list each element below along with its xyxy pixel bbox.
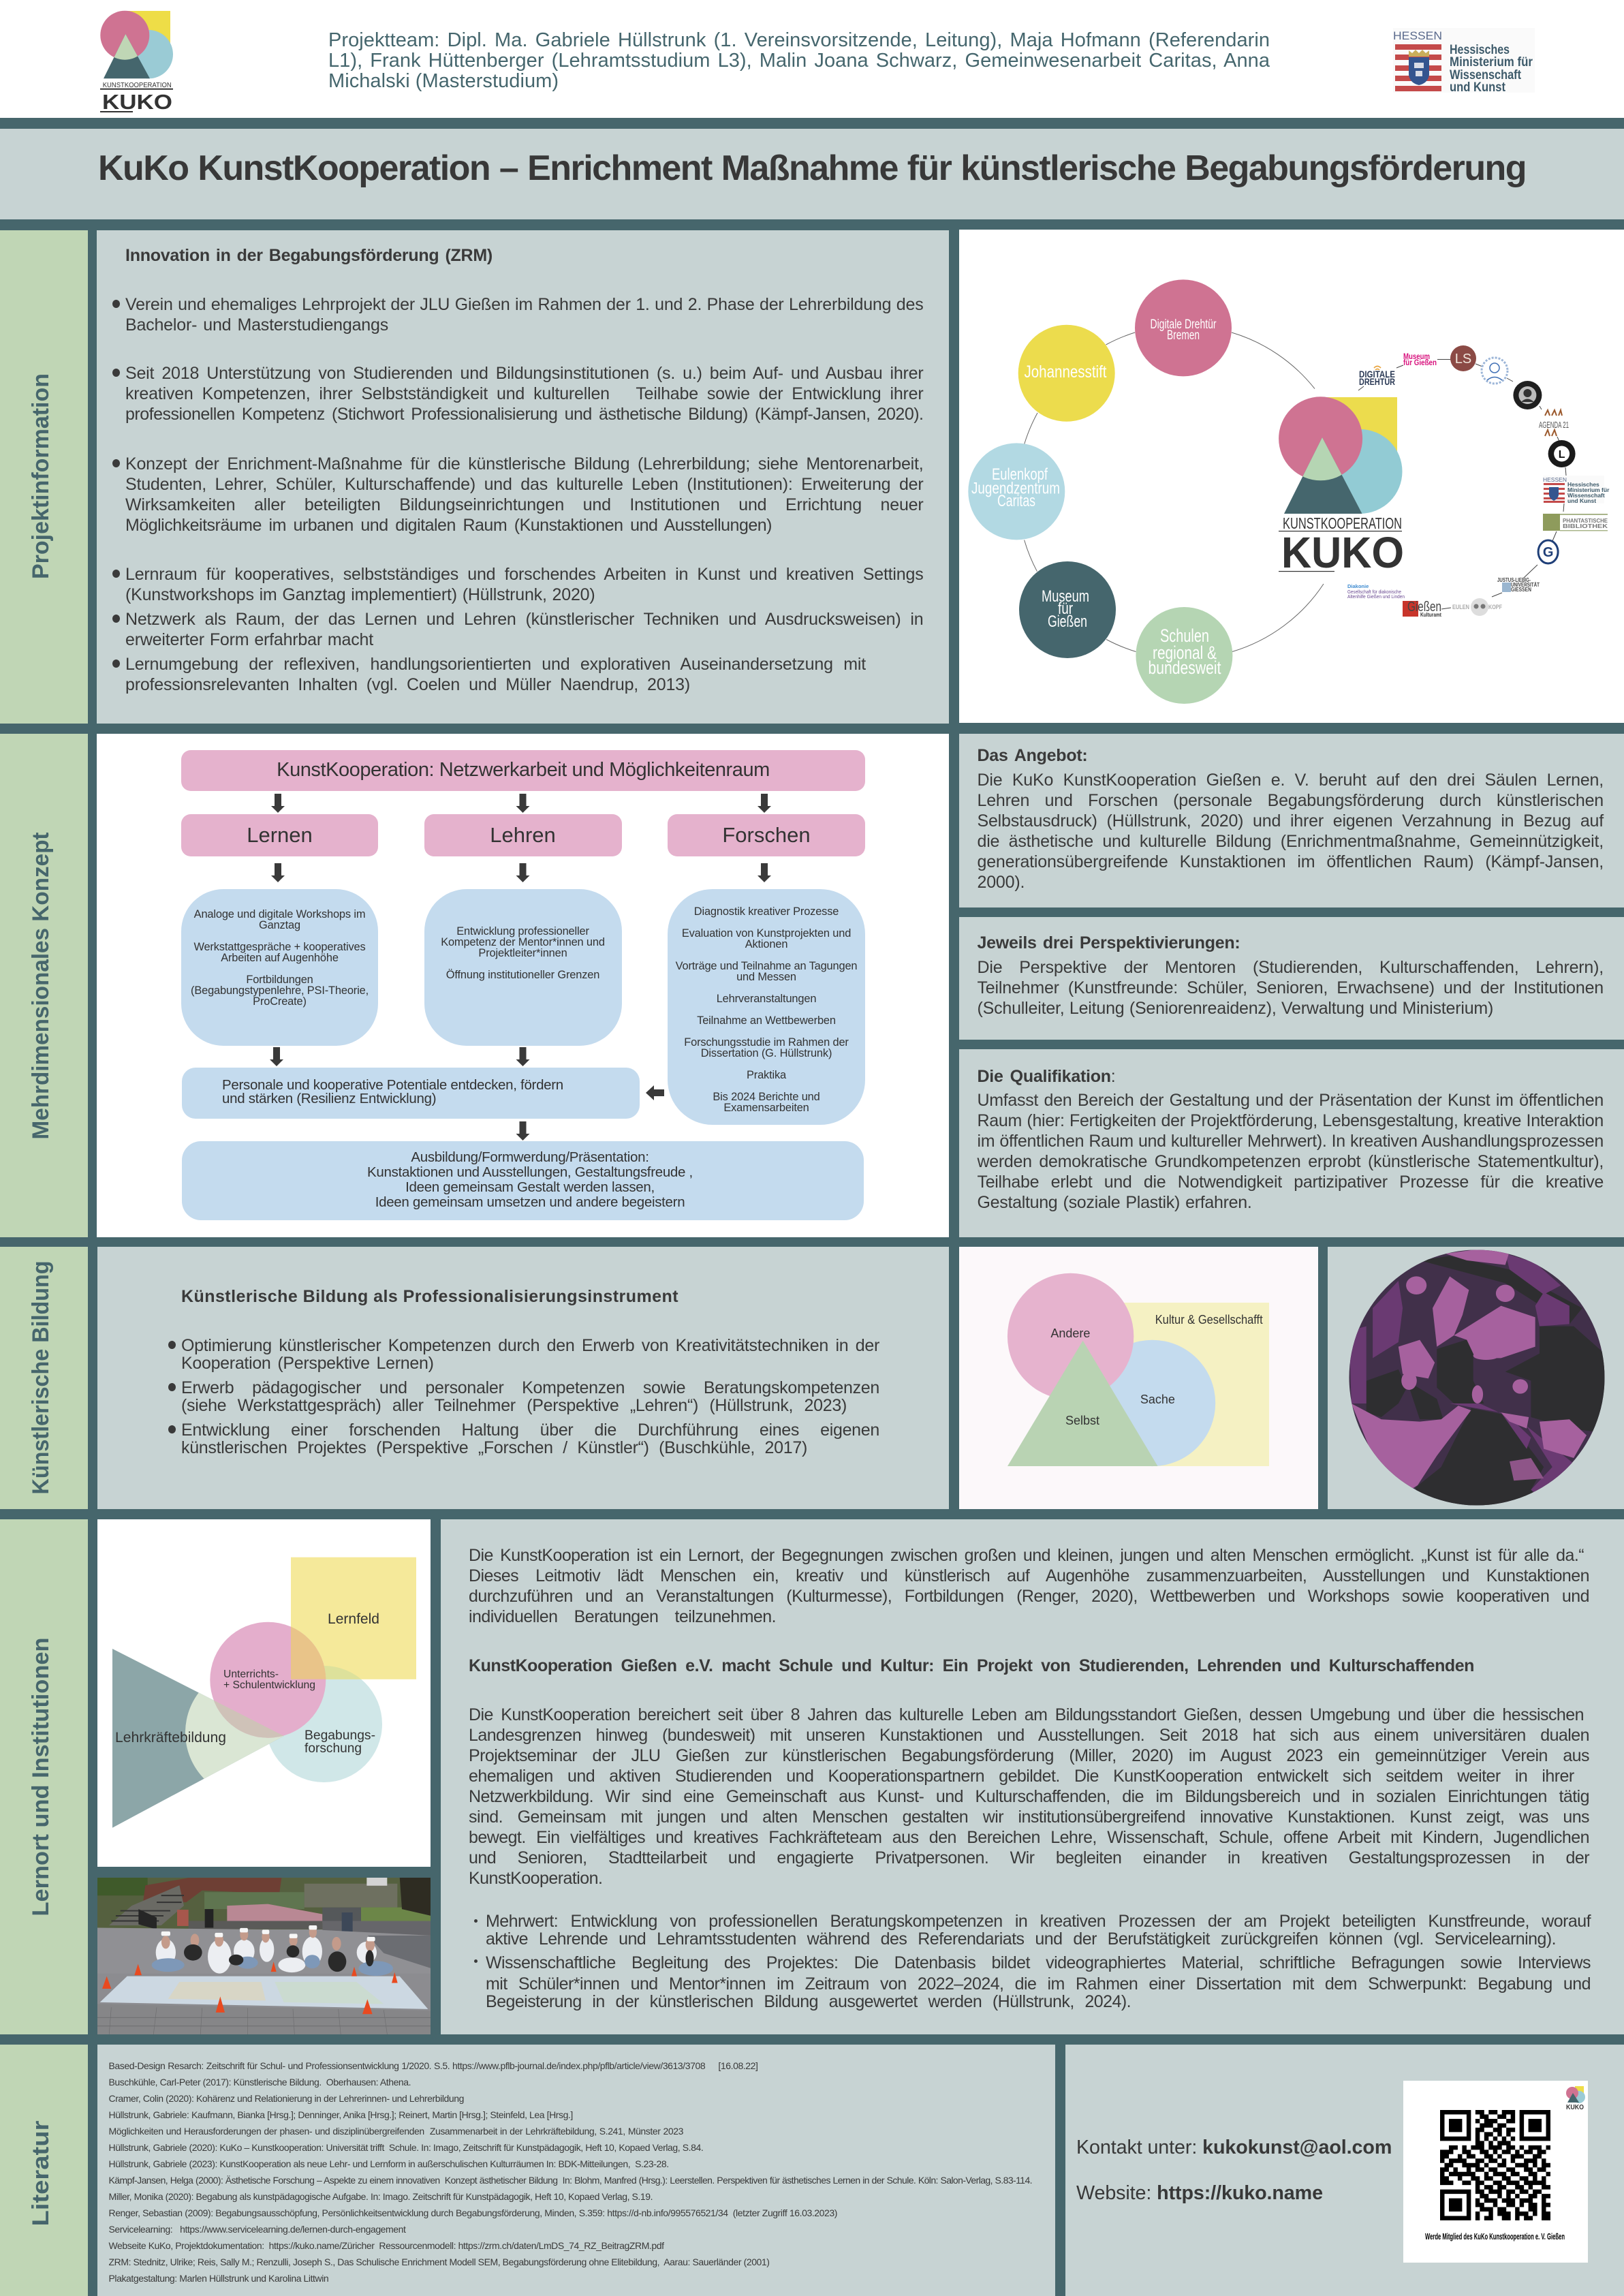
sidebar label: Literatur: Literatur — [28, 2120, 54, 2227]
partner logo: Digitale Drehtür: DREHTÜR — [1359, 376, 1395, 387]
box: Ausbildung: Ausbildung/Formwerdung/Präsentation: — [411, 1149, 649, 1165]
bullet: Entwicklung: Entwicklung einer forschenden Haltung über die Durchführung eines eigenen — [181, 1421, 879, 1440]
box: Lehren details: Entwicklung professioneller — [456, 925, 589, 937]
partner logo: Museum für Gießen: Museum — [1403, 353, 1430, 361]
shape: Pink-triangle overlap — [210, 1622, 326, 1738]
box: Forschen details: Dissertation (G. Hüllstrunk) — [701, 1047, 832, 1059]
text: Website: Website: https://kuko.name — [1076, 2182, 1323, 2204]
text: Lernort main — [469, 1705, 1589, 1889]
text: Lernort intro: Die KunstKooperation ist ein Lernort, der Begegnungen zwischen großen und kleinen, jungen und alten Menschen ermöglicht. „Kunst ist für alle da.“ — [469, 1546, 1584, 1565]
bullet: Seit 2018: professionellen Kompetenz (Stichwort Professionalisierung und ästhetische Bildung) (Kämpf-Jansen, 2020). — [125, 405, 924, 424]
box: Forschen details: Evaluation von Kunstprojekten und — [682, 927, 851, 940]
heading: KunstKooperation Gießen: KunstKooperation Gießen e.V. macht Schule und Kultur: Ein Projekt von Studierenden, Lehrenden und Kulturschaffenden — [469, 1656, 1474, 1675]
box: Lehren details: Projektleiter*innen — [478, 947, 567, 959]
QR code — [1440, 2112, 1550, 2218]
heading: Das Angebot: Das Angebot: — [977, 746, 1087, 765]
labels: Lehrkräftebildung — [115, 1730, 226, 1746]
text: Lernort main: sind. Gemeinsam mit jungen und alten Menschen gestalten wir institutionsübergreifend innovative Kunstaktionen. Kunst zeigt, was uns — [469, 1808, 1589, 1827]
bullet: Mehrwert: aktive Lehrende und Lehramtsstudenten während des Referendariats und der Berufstätigkeit zurückgreifen können (vgl. Servicelearning). — [486, 1929, 1556, 1949]
bullet: Wissenschaftliche Begleitung: mit Schüler*innen und Mentor*innen im Zeitraum von 2022–2024, die im Rahmen einer Dissertation mit dem Schwerpunkt: Begabung und — [486, 1974, 1591, 1994]
box: Lehren: Lehren — [490, 823, 556, 847]
bullet: Optimierung: Kooperation (Perspektive Lernen) — [181, 1354, 434, 1373]
bullet: Verein: Verein und ehemaliges Lehrprojekt der JLU Gießen im Rahmen der 1. und 2. Phase der Lehrerbildung des — [125, 295, 924, 314]
partner logo: G circle — [1538, 540, 1558, 563]
partner logo: Hessen ministry small: Wissenschaft — [1567, 492, 1605, 499]
bullet: Netzwerk: Netzwerk als Raum, der das Lernen und Lehren (künstlerischer Techniken und Ausdrucksweisen) in — [125, 609, 924, 628]
heading: Innovation: Innovation in der Begabungsförderung (ZRM) — [125, 246, 493, 265]
references list — [109, 2058, 1049, 2286]
box: Lehren details — [424, 888, 621, 1046]
sidebar label: Mehrdimensionales Konzept — [0, 734, 88, 1237]
shape: Kultur & Gesellschaft: Kultur & Gesellschafft — [1155, 1313, 1263, 1327]
partner logo: Museum für Gießen: für Gießen — [1403, 359, 1437, 367]
partner logo: Museum für Gießen — [1403, 353, 1437, 367]
title band — [0, 129, 1624, 219]
shape: Begabungsforschung — [266, 1666, 382, 1782]
bullet: Erwerb: Erwerb pädagogischer und personaler Kompetenzen sowie Beratungskompetenzen — [181, 1378, 879, 1397]
box: Lernen details: Arbeiten auf Augenhöhe — [221, 952, 339, 964]
shape: Yellow-teal overlap — [324, 1666, 361, 1679]
box: Ausbildung — [182, 1141, 864, 1220]
circle: Digitale Drehtür Bremen — [1135, 279, 1232, 376]
text: Qualifikation: im öffentlichen Raum und kultureller Mehrwert). In kreativen Aushandlungsprozessen — [977, 1132, 1604, 1151]
box: Forschen details: Praktika — [747, 1069, 786, 1081]
partner logo: Hessen ministry small: HESSEN — [1543, 476, 1567, 483]
box: KunstKooperation: KunstKooperation: Netzwerkarbeit und Möglichkeitenraum — [277, 759, 770, 781]
partner logo: Agenda 21 — [1539, 410, 1569, 436]
partner logo: JLU: GIESSEN — [1511, 586, 1531, 593]
bullet: Netzwerk: erweiterter Form erfahrbar macht — [125, 630, 373, 649]
bullet: Lernraum — [112, 564, 924, 604]
partner logo: JLU — [1497, 576, 1540, 593]
shape: Triangle overlap — [185, 1666, 317, 1799]
box: Lehren details: Öffnung institutioneller Grenzen — [446, 969, 599, 981]
partner logo: Eulenkopf: EULEN — [1452, 604, 1469, 610]
text: Perspektivierungen: (Schulleiter, Leitung (Seniorenreaidenz), Verwaltung und Ministerium) — [977, 999, 1493, 1018]
bullet: Verein — [112, 295, 924, 335]
text: Angebot: Die KuKo KunstKooperation Gießen e. V. beruht auf den drei Säulen Lernen, — [977, 771, 1604, 790]
sidebar label: Projektinformation: Projektinformation — [28, 373, 54, 579]
circle: Schulen: Schulen — [1160, 625, 1209, 646]
references list: Hüllstrunk, Gabriele (2023): KunstKooperation als neue Lehr- und Lernform in außerschulischen Kulturräumen In: BDK-Mitteilungen, S.23-28. — [109, 2158, 669, 2169]
bullet: Seit 2018: kreativen Kompetenzen, ihrer Selbstständigkeit und kulturellen Teilhabe sowie der Entwicklung ihrer — [125, 384, 924, 403]
sidebar label: Projektinformation — [0, 230, 88, 724]
partner logo: round seal — [1513, 381, 1542, 409]
circle: Museum für Gießen: Museum — [1042, 587, 1089, 606]
panel: Venn diagram — [959, 1247, 1318, 1509]
box: Ausbildung: Ideen gemeinsam Gestalt werden lassen, — [405, 1179, 655, 1195]
sidebar label: Künstlerische Bildung: Künstlerische Bildung — [28, 1260, 54, 1495]
text: Lernort intro: durchzuführen und an Veranstaltungen (Kulturmesse), Fortbildungen (Renger, 2020), Wettbewerben und Workshops sowie kooperativen und — [469, 1587, 1589, 1606]
bullet: Seit 2018: Seit 2018 Unterstützung von Studierenden und Bildungsinstitutionen (s. u.) beim Auf- und Ausbau ihrer — [125, 364, 924, 383]
partner logo: LS: LS — [1455, 352, 1471, 367]
sidebar label: Lernort und Institutionen: Lernort und Institutionen — [28, 1638, 54, 1916]
logo: small KuKo: KUKO — [1566, 2104, 1584, 2111]
panel: Künstlerische Bildung — [97, 1247, 949, 1509]
title: KuKo KunstKooperation – Enrichment Maßnahme für künstlerische Begabungsförderung — [98, 149, 1526, 188]
box: Ausbildung: Kunstaktionen und Ausstellungen, Gestaltungsfreude , — [367, 1164, 693, 1180]
references list: Kämpf-Jansen, Helga (2000): Ästhetische Forschung – Aspekte zu einem innovativen Konzept ästhetischer Bildung In: Blohm, Manfred (Hrsg.): Leerstellen. Perspektiven für ästhetisches Lernen in der Schule. Köln: Salon-Verlag, S.83-114. — [109, 2175, 1032, 2186]
box: Lernen details: Fortbildungen — [246, 974, 313, 986]
partner logo: LS — [1450, 345, 1476, 371]
box: Potentiale: und stärken (Resilienz Entwicklung) — [222, 1091, 436, 1106]
bullet: Wissenschaftliche Begleitung: Begeisterung in der künstlerischen Bildung ausgewertet werden (Hüllstrunk, 2024). — [486, 1992, 1131, 2011]
circle: Digitale Drehtür Bremen: Bremen — [1167, 328, 1200, 343]
text: Qualifikation — [977, 1090, 1604, 1213]
bullet: Erwerb: (siehe Werkstattgespräch) aller Teilnehmer (Perspektive „Lehren“) (Hüllstrunk, 2023) — [181, 1396, 847, 1415]
references list: Buschkühle, Carl-Peter (2017): Künstlerische Bildung. Oberhausen: Athena. — [109, 2077, 411, 2088]
partner logo: Gießen Kulturamt: Kulturamt — [1420, 612, 1441, 618]
text: Angebot: die ästhetische und kulturelle Bildung (Enrichmentmaßnahme, Gemeinnützigkeit, — [977, 832, 1604, 851]
references list: Cramer, Colin (2020): Kohärenz und Relationierung in der Lehrerinnen- und Lehrerbildung — [109, 2093, 464, 2104]
partner logo: Gießen Kulturamt — [1403, 600, 1441, 618]
ring connectors — [1025, 332, 1566, 651]
logo: KuKo centre — [1279, 397, 1404, 577]
heading: Perspektivierungen: Jeweils drei Perspektivierungen: — [977, 933, 1240, 952]
shape: Lehrkräftebildung — [112, 1649, 284, 1828]
labels: forschung — [304, 1741, 362, 1756]
bullet: Verein: Bachelor- und Masterstudiengangs — [125, 315, 388, 335]
circle: Schulen: regional & — [1153, 642, 1217, 663]
logo: KuKo centre: KUKO — [1281, 528, 1404, 577]
arrows — [270, 794, 771, 1141]
circle: Museum für Gießen — [1019, 561, 1116, 658]
panel: Qualifikation — [959, 1049, 1624, 1237]
box: Forschen details: Bis 2024 Berichte und — [713, 1091, 820, 1103]
bullet: Wissenschaftliche Begleitung — [486, 1953, 1591, 2012]
bullet: Seit 2018 — [112, 364, 924, 424]
labels: Unterrichts- — [223, 1669, 279, 1680]
box: Forschen: Forschen — [722, 823, 811, 847]
box: Potentiale: Personale und kooperative Potentiale entdecken, fördern — [222, 1077, 563, 1093]
panel: purple photo — [1328, 1247, 1624, 1509]
box: Lehren details: Kompetenz der Mentor*innen und — [441, 936, 605, 948]
panel: Literatur — [97, 2045, 1055, 2296]
partner logo: Phantastische Bibliothek — [1543, 514, 1608, 531]
header band — [0, 0, 1624, 118]
text: Lernort intro — [469, 1545, 1589, 1627]
partner logo: Hessen ministry small: Ministerium für — [1567, 486, 1610, 493]
text: Lernort main: bewegt. Ein vielfältiges und kreatives Fachkräfteteam aus den Bereichen Lehre, Wissenschaft, Schule, offene Arbeit mit Kindern, Jugendlichen — [469, 1828, 1589, 1847]
references list: Miller, Monika (2020): Begabung als kunstpädagogische Aufgabe. In: Imago. Zeitschrift für Kunstpädagogik, Heft 10, Kopaed Verlag, S.19. — [109, 2191, 653, 2202]
partner logo: JLU: UNIVERSITÄT — [1511, 581, 1540, 588]
box: Forschen details — [668, 888, 865, 1125]
bullet: Mehrwert — [486, 1912, 1591, 1949]
circle: Eulenkopf: Jugendzentrum — [971, 480, 1060, 497]
references list: Hüllstrunk, Gabriele: Kaufmann, Bianka [Hrsg.]; Denninger, Anika [Hrsg.]; Reinert, Martin [Hrsg.]; Steinfeld, Lea [Hrsg.] — [109, 2109, 573, 2120]
box: Lehren — [424, 814, 621, 856]
bullet: Konzept: Möglichkeitsräume im urbanen und digitalen Raum (Kunstaktionen und Ausstellungen) — [125, 516, 772, 535]
circle: Schulen: bundesweit — [1149, 657, 1221, 678]
references list: Webseite KuKo, Projektdokumentation: https://kuko.name/Züricher Ressourcenmodell: https://zrm.ch/daten/LmDS_74_RZ_BeitragZRM.pdf — [109, 2240, 664, 2251]
bullet: Entwicklung — [181, 1421, 879, 1457]
circle: Johannesstift — [1018, 325, 1115, 422]
project team text: Michalski (Masterstudium) — [328, 70, 559, 92]
labels: Sache — [1140, 1393, 1175, 1406]
partner logo: Agenda 21: AGENDA 21 — [1539, 420, 1569, 430]
partner logo: Diakonie: Gesellschaft für diakonische — [1347, 590, 1401, 595]
bullet: Mehrwert: Mehrwert: Entwicklung von professionellen Beratungskompetenzen in kreativen Prozessen der am Projekt beteiligten Kunstfreunde, worauf — [486, 1912, 1591, 1931]
bullet: Konzept: Konzept der Enrichment-Maßnahme für die künstlerische Bildung (Lehrerbildung; siehe Mentorenarbeit, — [125, 454, 924, 474]
box: Forschen details: Lehrveranstaltungen — [717, 993, 816, 1005]
partner logo: Digitale Drehtür: DIGITALE — [1359, 369, 1395, 379]
box: Forschen details: Teilnahme an Wettbewerben — [697, 1014, 836, 1027]
shape: Andere — [1008, 1273, 1134, 1399]
photo: group on chalk painting — [97, 1878, 431, 2034]
panel: flow chart — [97, 734, 949, 1237]
partner logo: Eulenkopf — [1452, 598, 1502, 616]
circle: Museum für Gießen: Gießen — [1048, 612, 1087, 631]
panel: Kontakt — [1065, 2045, 1624, 2296]
references list: Plakatgestaltung: Marlen Hüllstrunk und Karolina Littwin — [109, 2273, 328, 2284]
labels: Begabungs- — [304, 1728, 375, 1743]
box: Lernen details: ProCreate) — [253, 995, 307, 1008]
project team text: Projektteam: Dipl. Ma. Gabriele Hüllstrunk (1. Vereinsvorsitzende, Leitung), Maja Hofmann (Referendarin — [328, 29, 1270, 51]
shape: Unterrichtsentwicklung — [210, 1622, 326, 1738]
labels: + Schulentwicklung — [223, 1679, 315, 1691]
box: Lernen details — [181, 888, 378, 1046]
partner logo: Digitale Drehtür — [1359, 367, 1395, 387]
heading: Qualifikation: Die Qualifikation: — [977, 1067, 1116, 1086]
circle: Eulenkopf: Caritas — [997, 492, 1035, 510]
box: Lernen details: Analoge und digitale Workshops im — [194, 908, 365, 920]
logo: Hessen ministry: Wissenschaft — [1450, 68, 1522, 82]
project team text — [328, 29, 1270, 92]
box: Potentiale — [182, 1068, 640, 1119]
circle: Eulenkopf: Eulenkopf — [992, 465, 1048, 484]
logo: KuKo: KUKO — [102, 90, 172, 114]
references list: Hüllstrunk, Gabriele (2020): KuKo – Kunstkooperation: Universität trifft Schule. In: Imago, Zeitschrift für Kunstpädagogik, Heft 10, Kopaed Verlag, S.84. — [109, 2142, 703, 2153]
panel: network diagram — [959, 230, 1624, 723]
box: Lernen: Lernen — [247, 823, 313, 847]
box: Lernen details: Werkstattgespräche + kooperatives — [193, 941, 366, 953]
partner logo: JLU: JUSTUS-LIEBIG- — [1497, 576, 1531, 583]
partner logo: Hessen ministry small — [1543, 476, 1610, 504]
text: Qualifikation: Raum (hier: Fertigkeiten der Projektförderung, Lebensgestaltung, kreative Interaktion — [977, 1111, 1604, 1130]
text: Qualifikation: Umfasst den Bereich der Gestaltung und der Präsentation der Kunst im öffentlichen — [977, 1091, 1604, 1110]
logo: Hessen ministry — [1393, 29, 1533, 93]
shape: Sache — [1089, 1340, 1215, 1466]
partner logo: Hessen ministry small: und Kunst — [1567, 497, 1596, 504]
labels: Lernfeld — [328, 1611, 379, 1627]
box: Forschen details: Examensarbeiten — [723, 1102, 809, 1114]
references list: Based-Design Resarch: Zeitschrift für Schul- und Professionsentwicklung 1/2020. S.5. https://www.pflb-journal.de/index.php/pflb/article/view/3613/3708 [16.08.22] — [109, 2060, 758, 2071]
partner logo: Diakonie: Diakonie — [1347, 583, 1369, 589]
box: Lernen details: (Begabungstypenlehre, PSI-Theorie, — [191, 984, 369, 997]
text: Lernort main: Landesgrenzen hinweg (bundesweit) mit unseren Kunstaktionen und Ausstellungen. Seit 2018 hat sich aus einem universitären dualen — [469, 1726, 1589, 1745]
shape: Kultur & Gesellschaft — [1082, 1303, 1269, 1466]
shape: Pink-yellow overlap — [210, 1622, 326, 1738]
bullet: Entwicklung: künstlerischen Projektes (Perspektive „Forschen / Künstler“) (Buschkühle, 2017) — [181, 1438, 807, 1457]
logo: Hessen ministry: HESSEN — [1393, 29, 1442, 42]
text: Lernort main: und Senioren, Stadtteilarbeit und engagierte Privatpersonen. Wir begleiten einander in kreativen Gestaltungsprozessen in der — [469, 1848, 1589, 1867]
text: Lernort main: Netzwerkbildung. Wir sind eine Gemeinschaft aus Kunst- und Kulturschaffenden, die im Bildungsbereich und in sozialen Einrichtungen tätig — [469, 1787, 1589, 1806]
panel: Perspektivierungen — [959, 917, 1624, 1040]
text: Angebot: Selbstausdruck) (Hüllstrunk, 2020) und ihrer eigenen Verzahnung in Bezug auf — [977, 811, 1604, 831]
box: KunstKooperation — [181, 750, 865, 791]
box: Forschen details: Diagnostik kreativer Prozesse — [694, 905, 839, 918]
box: Ausbildung: Ideen gemeinsam umsetzen und andere begeistern — [375, 1194, 685, 1210]
bullet: Netzwerk — [112, 609, 924, 649]
circle: Schulen — [1136, 607, 1232, 704]
text: Angebot: Lehren und Forschen (personale Begabungsförderung durch künstlerischen — [977, 791, 1604, 810]
labels — [1050, 1327, 1175, 1427]
sidebar label: Künstlerische Bildung — [0, 1247, 88, 1509]
bullet: Konzept: Wirksamkeiten aller beteiligten Bildungseinrichtungen und Institutionen und Errichtung neuer — [125, 495, 924, 514]
partner logo: Büchner Schule — [1482, 358, 1508, 384]
bullet: Optimierung — [181, 1337, 879, 1372]
circle: Digitale Drehtür Bremen: Digitale Drehtür — [1150, 317, 1217, 332]
references list: ZRM: Stednitz, Ulrike; Reis, Sally M.; Renzulli, Joseph S., Das Schulische Enrichment Modell SEM, Begabungsförderung ohne Elitebildung, Aarau: Sauerländer (2001) — [109, 2256, 770, 2267]
bullet: Lernraum: (Kunstworkshops im Ganztag implementiert) (Hüllstrunk, 2020) — [125, 585, 595, 604]
sidebar label: Lernort und Institutionen — [0, 1519, 88, 2034]
partner logo: Diakonie: Altenhilfe Gießen und Linden — [1347, 595, 1405, 600]
partner logo: Hessen ministry small: Hessisches — [1567, 481, 1599, 488]
card: QR code — [1403, 2081, 1588, 2263]
box: Forschen details: und Messen — [736, 971, 796, 983]
references list: Servicelearning: https://www.servicelearning.de/lernen-durch-engagement — [109, 2224, 406, 2235]
text: Lernort intro: individuellen Beratungen teilzunehmen. — [469, 1607, 776, 1626]
text: Angebot — [977, 771, 1604, 892]
partner logo: G circle: G — [1543, 545, 1553, 560]
partner logo: Gießen Kulturamt: Gießen — [1407, 600, 1441, 615]
text: Perspektivierungen: Teilnehmer (Kunstfreunde: Schüler, Senioren, Erwachsene) und der Institutionen — [977, 978, 1604, 997]
bullet: Lernumgebung — [112, 655, 866, 694]
shape: Selbst — [1008, 1341, 1158, 1466]
text: Kontakt: Kontakt unter: kukokunst@aol.com — [1076, 2137, 1392, 2158]
partner logo: Lions — [1548, 440, 1576, 467]
panel: Lernfeld diagram — [97, 1519, 431, 1867]
bullet: Erwerb — [181, 1379, 879, 1414]
bullet: Konzept — [112, 454, 924, 535]
box: Forschen details: Forschungsstudie im Rahmen der — [684, 1036, 849, 1049]
references list: Renger, Sebastian (2009): Begabungsausschöpfung, Persönlichkeitsentwicklung durch Begabungsförderung, Minden, S.359: https://d-nb.info/995576521/34 (letzter Zugriff 16.03.2023) — [109, 2207, 837, 2218]
labels: Andere — [1050, 1327, 1090, 1340]
bullet: Lernumgebung: professionsrelevanten Inhalten (vgl. Coelen und Müller Naendrup, 2013) — [125, 675, 690, 694]
logo: small KuKo — [1566, 2086, 1585, 2111]
partner logo: Lions: L — [1559, 449, 1565, 461]
sidebar label: Mehrdimensionales Konzept: Mehrdimensionales Konzept — [28, 833, 54, 1139]
text: Angebot: generationsübergreifende Kunstaktionen im öffentlichen Raum) (Kämpf-Jansen, — [977, 852, 1604, 871]
logo: Hessen ministry: Hessisches — [1450, 43, 1510, 57]
project team text: L1), Frank Hüttenberger (Lehramtsstudium L3), Malin Joana Schwarz, Gemeinwesenarbeit Caritas, Anna — [328, 50, 1270, 72]
circle: Eulenkopf — [968, 443, 1065, 540]
text: Lernort main: KunstKooperation. — [469, 1869, 602, 1888]
bullet: Wissenschaftliche Begleitung: Wissenschaftliche Begleitung des Projektes: Die Datenbasis bildet videographiertes Material, schriftliche Befragungen sowie Interviews — [486, 1953, 1591, 1972]
box: Forschen details: Aktionen — [745, 938, 787, 950]
labels — [115, 1611, 379, 1756]
text: Lernort main: Projektseminar der JLU Gießen zur künstlerischen Begabungsförderung (Miller, 2020) im August 2023 ein gemeinnütziger Verein aus — [469, 1746, 1589, 1765]
sidebar label: Literatur — [0, 2045, 88, 2296]
text: Qualifikation: werden demokratische Grundkompetenzen erprobt (künstlerische Statementkultur), — [977, 1152, 1604, 1171]
heading: Professionalisierungsinstrument: Künstlerische Bildung als Professionalisierungsinstrument — [181, 1287, 678, 1306]
box: Forschen details: Vorträge und Teilnahme an Tagungen — [676, 960, 857, 972]
panel: Lernort text — [441, 1519, 1624, 2034]
text: Qualifikation: Gestaltung (soziale Plastik) erfahren. — [977, 1193, 1252, 1212]
circle: Johannesstift: Johannesstift — [1025, 362, 1107, 382]
text: Qualifikation: Teilhabe erlebt und die Notwendigkeit partizipativer Prozesse für die kreative — [977, 1173, 1604, 1192]
text: Lernort intro: Dieses Leitmotiv lädt Menschen ein, kreativ und künstlerisch auf Augenhöhe zusammenzuarbeiten, Ausstellungen und Kunstaktionen — [469, 1566, 1589, 1585]
partner logo: Diakonie — [1347, 583, 1405, 600]
panel: Innovation in der Begabungsförderung — [97, 230, 949, 724]
text: Lernort main: Die KunstKooperation bereichert seit über 8 Jahren das kulturelle Leben am Bildungsstandort Gießen, dessen Umgebung und über die hessischen — [469, 1705, 1584, 1724]
box: Lernen — [181, 814, 378, 856]
references list: Möglichkeiten und Herausforderungen der phasen- und disziplinübergreifenden Zusammenarbeit in der Lehrkräftebildung, S.241, Münster 2023 — [109, 2126, 683, 2137]
logo: KuKo: KUNSTKOOPERATION — [103, 81, 172, 89]
box: Lernen details: Ganztag — [259, 919, 300, 931]
shape: Lernfeld — [291, 1557, 416, 1679]
text: Lernort main: ehemaligen und aktiven Studierenden und Kooperationspartnern gebildet. Die KunstKooperation entwickelt sich seitdem weiter in ihrer — [469, 1767, 1574, 1786]
partner logo: Phantastische Bibliothek: BIBLIOTHEK — [1563, 523, 1608, 529]
bullet: Optimierung: Optimierung künstlerischer Kompetenzen durch den Erwerb von Kreativitätstechniken in der — [181, 1336, 879, 1355]
text: Perspektivierungen — [977, 957, 1604, 1018]
box: Forschen — [668, 814, 865, 856]
labels: Selbst — [1065, 1414, 1099, 1427]
partner logo: Phantastische Bibliothek: PHANTASTISCHE — [1563, 518, 1608, 524]
bullet: Konzept: Studenten, Lehrer, Schüler, Kulturschaffende) und das kulturelle Leben (Institutionen): Erweiterung der — [125, 475, 924, 494]
partner logo: Eulenkopf: KOPF — [1488, 604, 1502, 610]
circle: Museum für Gießen: für — [1058, 600, 1073, 618]
logo: KuKo — [100, 11, 173, 114]
text: Perspektivierungen: Die Perspektive der Mentoren (Studierenden, Kulturschaffenden, Lehrern), — [977, 958, 1604, 977]
text: Angebot: 2000). — [977, 873, 1025, 892]
logo: KuKo centre: KUNSTKOOPERATION — [1283, 514, 1402, 532]
bullet: Lernraum: Lernraum für kooperatives, selbstständiges und forschendes Arbeiten in Kunst und kreativen Settings — [125, 564, 924, 583]
bullet: Lernumgebung: Lernumgebung der reflexiven, handlungsorientierten und explorativen Auseinandersetzung mit — [125, 655, 866, 674]
panel: Das Angebot — [959, 734, 1624, 907]
